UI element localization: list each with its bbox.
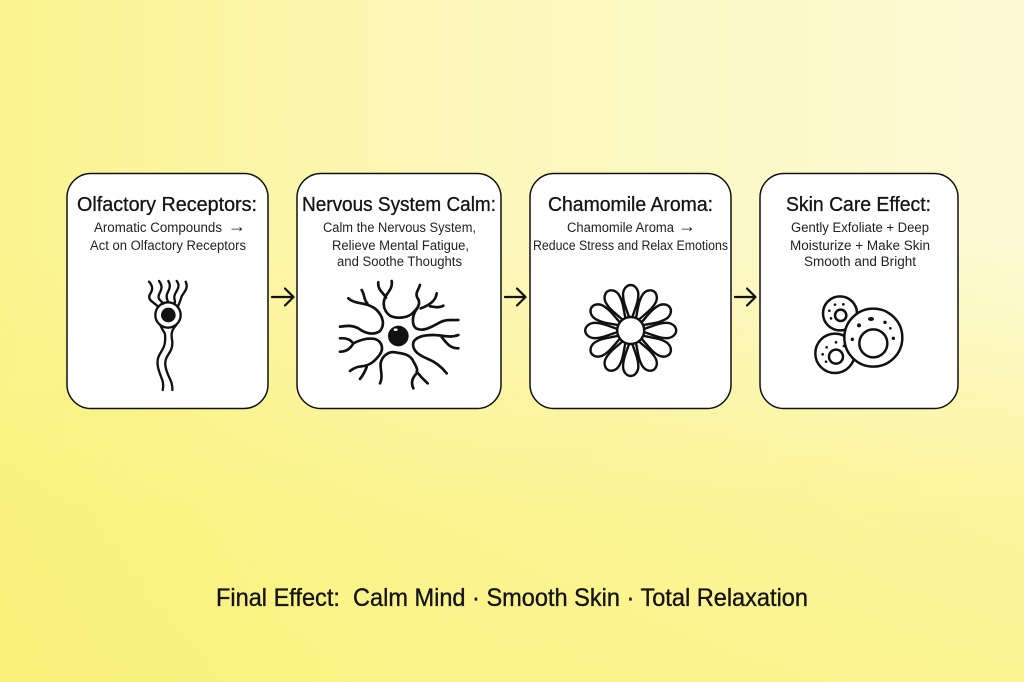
description: chamomile aroma: → [678, 216, 696, 236]
icon: neuron [340, 281, 458, 388]
description: olfactory receptors: Aromatic Compounds [94, 220, 222, 235]
description: skin care effect: Smooth and Bright [804, 254, 916, 269]
description: nervous system calm: Relieve Mental Fatigue, [332, 238, 469, 253]
card background [67, 174, 268, 408]
description: skin care effect [790, 220, 930, 269]
icon: chamomile flower [585, 285, 676, 376]
card background [297, 174, 501, 408]
card background [760, 174, 958, 408]
icon: skin cells [815, 296, 902, 373]
panel: chamomile aroma [530, 174, 731, 408]
description: chamomile aroma: Reduce Stress and Relax Emotions [533, 238, 728, 253]
arrow 1 [272, 288, 294, 306]
heading: olfactory receptors: Olfactory Receptors: [77, 194, 257, 216]
description: nervous system calm: and Soothe Thoughts [337, 254, 462, 269]
arrow 3 [735, 288, 756, 306]
description: skin care effect: Moisturize + Make Skin [790, 238, 930, 253]
icon: olfactory receptor cell [149, 281, 187, 390]
heading: skin care effect: Skin Care Effect: [786, 194, 931, 216]
card background [530, 174, 731, 408]
panel: nervous system calm [297, 174, 501, 408]
description: olfactory receptors: → [228, 216, 246, 236]
description: nervous system calm: Calm the Nervous System, [323, 220, 476, 235]
heading: chamomile aroma: Chamomile Aroma: [548, 194, 713, 216]
description: olfactory receptors: Act on Olfactory Receptors [90, 238, 246, 253]
heading: nervous system calm: Nervous System Calm: [302, 194, 496, 216]
panel: olfactory receptors [67, 174, 268, 408]
arrow 2 [505, 288, 526, 306]
description: skin care effect: Gently Exfoliate + Deep [791, 220, 929, 235]
description: nervous system calm [323, 220, 476, 269]
description: chamomile aroma [533, 216, 728, 253]
final effect statement: Final Effect: Calm Mind · Smooth Skin · Total Relaxation [216, 584, 808, 612]
description: olfactory receptors [90, 216, 246, 253]
description: chamomile aroma: Chamomile Aroma [567, 220, 674, 235]
panel: skin care effect [760, 174, 958, 408]
